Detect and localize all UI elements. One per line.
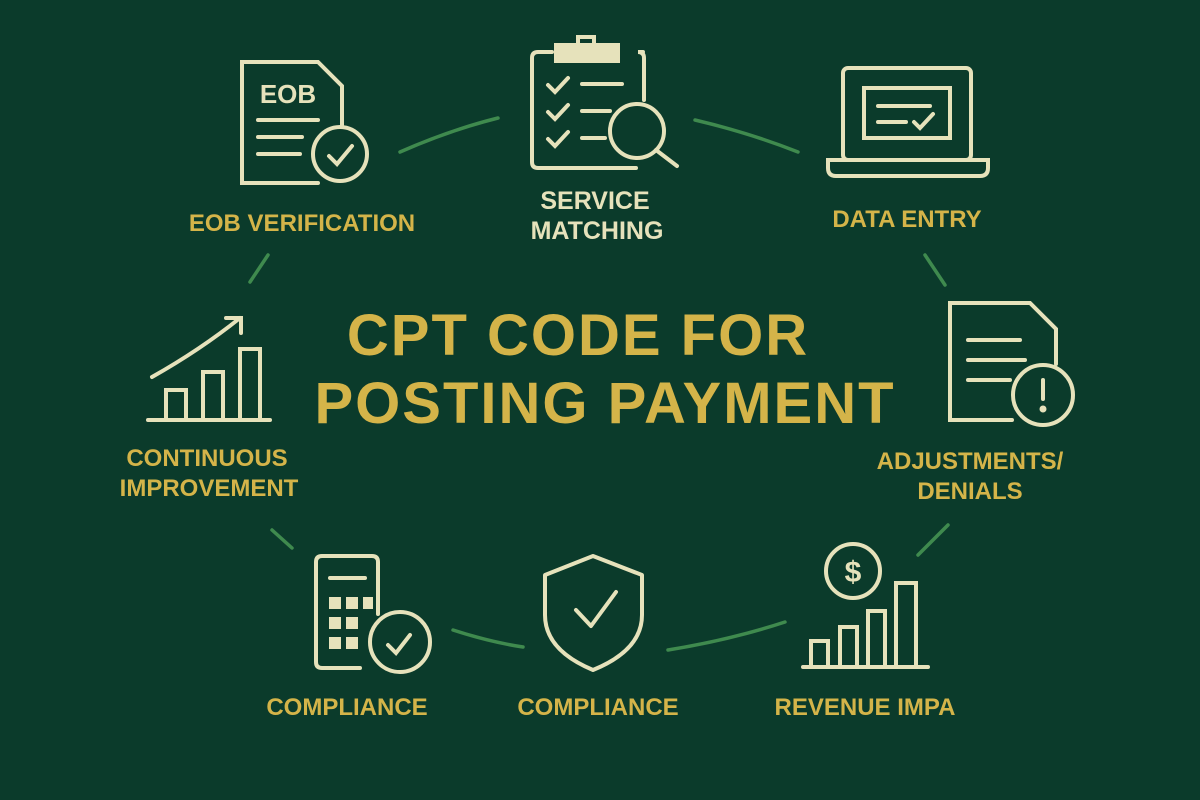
icon: shield [545,556,642,670]
icon: growth chart [148,318,270,420]
icon: revenue chart: $ [845,556,862,589]
icon: EOB document [242,62,367,183]
label: adjustments/denials [877,448,1064,505]
label: adjustments/denials: ADJUSTMENTS/ [877,448,1064,475]
label: compliance left: COMPLIANCE [266,694,428,721]
icon: clipboard [532,37,677,168]
label: data entry: DATA ENTRY [832,206,982,233]
icon: revenue chart [803,544,928,667]
label: service matching [531,187,663,245]
label: adjustments/denials: DENIALS [917,478,1023,505]
icon: EOB document: EOB [260,79,316,109]
label: compliance center: COMPLIANCE [517,694,679,721]
label: continuous improvement: CONTINUOUS [126,445,288,472]
label: continuous improvement [120,445,299,502]
title: POSTING PAYMENT [314,371,896,436]
label: service matching: MATCHING [531,217,663,245]
title [314,303,896,436]
title: CPT CODE FOR [347,303,809,368]
label: continuous improvement: IMPROVEMENT [120,475,299,502]
label: EOB verification: EOB VERIFICATION [189,210,415,237]
icon: laptop [828,68,988,176]
icon: calculator [316,556,430,672]
label: service matching: SERVICE [540,187,650,215]
icon: adjustments doc [950,303,1073,425]
label: revenue impact: REVENUE IMPA [775,694,955,721]
